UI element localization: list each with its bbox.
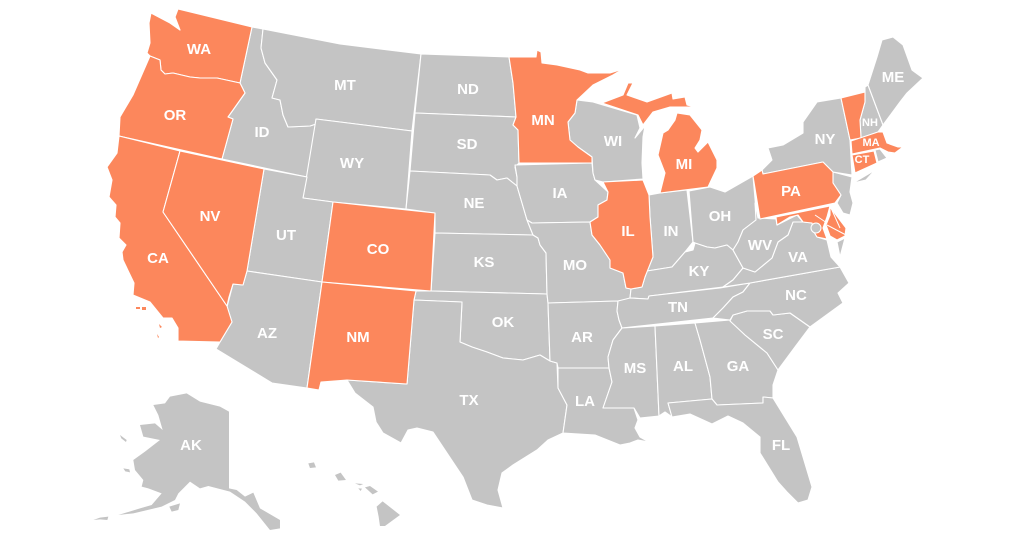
state: New York bbox=[762, 98, 852, 175]
state: Wyoming bbox=[303, 119, 412, 209]
state: New Jersey bbox=[833, 172, 853, 215]
state abbreviation labels: ND bbox=[457, 81, 479, 98]
state abbreviation labels: VA bbox=[788, 249, 808, 266]
state: Hawaii bbox=[308, 462, 400, 526]
state: North Carolina bbox=[713, 267, 849, 327]
state abbreviation labels: GA bbox=[727, 358, 749, 375]
state abbreviation labels: TX bbox=[459, 392, 479, 409]
state abbreviation labels: KY bbox=[689, 263, 709, 280]
state abbreviation labels: SC bbox=[763, 326, 784, 343]
state: Connecticut bbox=[852, 151, 877, 173]
state abbreviation labels: OR bbox=[164, 107, 186, 124]
Virginia eastern shore bbox=[837, 238, 845, 257]
state abbreviation labels: TN bbox=[668, 299, 688, 316]
state: Rhode Island bbox=[875, 149, 887, 162]
state abbreviation labels: IA bbox=[552, 185, 568, 202]
state: Iowa bbox=[515, 163, 608, 223]
state: New Mexico bbox=[307, 282, 416, 390]
state: Arkansas bbox=[548, 301, 622, 368]
Long Island bbox=[853, 170, 875, 183]
state: Washington bbox=[147, 9, 252, 83]
state: Missouri bbox=[527, 220, 631, 303]
state abbreviation labels: NH bbox=[862, 117, 878, 129]
state abbreviation labels: MS bbox=[624, 360, 646, 377]
state: Maine bbox=[868, 37, 923, 125]
state: Nevada bbox=[163, 151, 264, 306]
state: South Carolina bbox=[730, 311, 810, 370]
state: Indiana bbox=[647, 190, 693, 271]
state abbreviation labels: NC bbox=[785, 287, 807, 304]
state: Kentucky bbox=[630, 243, 743, 299]
state: Louisiana bbox=[558, 368, 649, 445]
state: Virginia bbox=[723, 222, 840, 287]
state abbreviation labels: UT bbox=[276, 227, 296, 244]
state abbreviation labels: MI bbox=[676, 156, 692, 173]
state abbreviation labels: CA bbox=[147, 250, 169, 267]
District of Columbia bbox=[811, 223, 821, 233]
state abbreviation labels: MT bbox=[334, 77, 356, 94]
state abbreviation labels: IN bbox=[664, 223, 678, 240]
state: Wisconsin bbox=[568, 100, 645, 182]
state abbreviation labels: WY bbox=[340, 155, 364, 172]
state: Ohio bbox=[689, 176, 756, 250]
states highlighted (orange) bbox=[107, 9, 846, 390]
state abbreviation labels: LA bbox=[575, 393, 595, 410]
state abbreviation labels: KS bbox=[474, 254, 494, 271]
Delaware and Maryland border lines bbox=[815, 208, 846, 235]
state abbreviation labels: WA bbox=[187, 41, 211, 58]
state abbreviation labels: AK bbox=[180, 437, 202, 454]
state abbreviation labels: AZ bbox=[257, 325, 277, 342]
state: Minnesota bbox=[509, 50, 623, 163]
California channel islands bbox=[136, 307, 162, 338]
state: Mississippi bbox=[603, 326, 659, 418]
state: Alabama bbox=[655, 323, 712, 417]
state: Arizona bbox=[216, 271, 322, 388]
state: Florida bbox=[668, 397, 812, 503]
state: Idaho bbox=[222, 27, 316, 177]
state: Nebraska bbox=[406, 171, 533, 235]
state abbreviation labels: MN bbox=[531, 112, 555, 129]
state abbreviation labels: NE bbox=[464, 195, 484, 212]
state: Kansas bbox=[431, 233, 547, 294]
state: New Hampshire bbox=[860, 85, 883, 138]
state: Massachusetts bbox=[851, 132, 903, 154]
state abbreviation labels: MA bbox=[862, 137, 880, 149]
state abbreviation labels: PA bbox=[781, 183, 801, 200]
state abbreviation labels: ME bbox=[882, 69, 904, 86]
states not highlighted (grey) bbox=[93, 27, 923, 530]
state: Illinois bbox=[590, 180, 653, 289]
state abbreviation labels: WV bbox=[748, 237, 772, 254]
state abbreviation labels bbox=[147, 41, 904, 454]
state: Oklahoma bbox=[414, 291, 550, 361]
state: Utah bbox=[247, 169, 333, 282]
state: Georgia bbox=[695, 320, 778, 405]
state: Oregon bbox=[119, 56, 245, 159]
state: Delaware and Maryland eastern shore bbox=[826, 207, 846, 240]
state: South Dakota bbox=[410, 113, 519, 186]
state abbreviation labels: NV bbox=[200, 208, 220, 225]
state abbreviation labels: FL bbox=[772, 437, 790, 454]
state abbreviation labels: ID bbox=[254, 124, 270, 141]
state abbreviation labels: NM bbox=[346, 329, 370, 346]
state abbreviation labels: SD bbox=[457, 136, 478, 153]
state abbreviation labels: OK bbox=[492, 314, 514, 331]
state abbreviation labels: AL bbox=[673, 358, 693, 375]
state abbreviation labels: CT bbox=[855, 154, 870, 166]
state: North Dakota bbox=[415, 54, 516, 117]
state: Michigan bbox=[602, 83, 717, 193]
state abbreviation labels: AR bbox=[571, 329, 593, 346]
state: California bbox=[107, 136, 232, 342]
state: Maryland bbox=[776, 206, 830, 239]
state: Pennsylvania bbox=[753, 162, 841, 219]
state: Montana bbox=[261, 29, 421, 131]
state abbreviation labels: OH bbox=[709, 208, 731, 225]
state: Tennessee bbox=[617, 283, 750, 328]
state abbreviation labels: WI bbox=[604, 133, 622, 150]
state abbreviation labels: MO bbox=[563, 257, 587, 274]
state: Alaska bbox=[93, 393, 280, 530]
state: West Virginia bbox=[733, 203, 803, 272]
state abbreviation labels: IL bbox=[621, 223, 635, 240]
state: Texas bbox=[347, 300, 567, 508]
state: Colorado bbox=[322, 202, 435, 291]
state abbreviation labels: NY bbox=[815, 131, 835, 148]
state abbreviation labels: CO bbox=[367, 241, 390, 258]
state: Vermont bbox=[841, 92, 865, 140]
